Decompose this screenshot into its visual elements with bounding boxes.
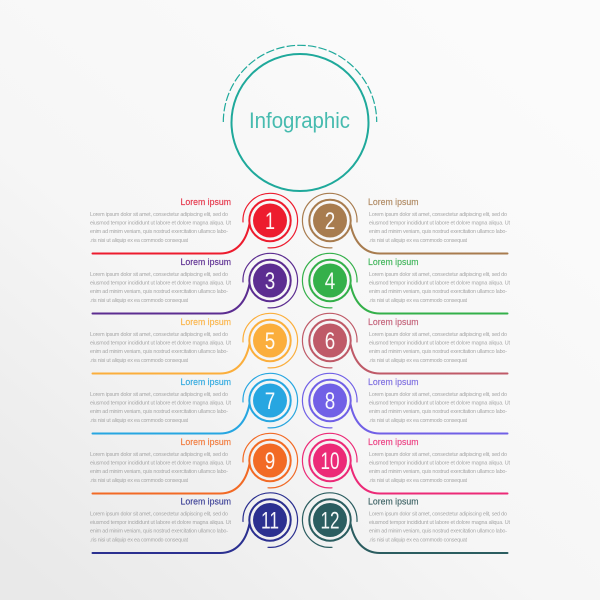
item 2: .ris nisi ut aliquip ex ea commodo consequat	[369, 238, 468, 244]
item 3: eiusmod tempor incididunt ut labore et dolore magna aliqua. Ut	[90, 281, 232, 287]
item 12: eiusmod tempor incididunt ut labore et dolore magna aliqua. Ut	[369, 520, 510, 526]
item 3: Lorem ipsum	[180, 257, 231, 268]
item 10	[302, 433, 510, 494]
item 6: Lorem ipsum	[368, 317, 419, 328]
item 8: eiusmod tempor incididunt ut labore et dolore magna aliqua. Ut	[369, 401, 510, 407]
item 1: enim ad minim veniam, quis nostrud exercitation ullamco labo-	[90, 229, 228, 235]
item 11	[90, 493, 298, 553]
item 1: 1	[265, 208, 275, 235]
item 5: .ris nisi ut aliquip ex ea commodo consequat	[90, 358, 188, 364]
item 10: 10	[320, 448, 340, 475]
item 4: Lorem ipsum dolor sit amet, consectetur adipiscing elit, sed do	[369, 272, 507, 278]
item 6: .ris nisi ut aliquip ex ea commodo consequat	[369, 358, 468, 364]
item 7: Lorem ipsum dolor sit amet, consectetur adipiscing elit, sed do	[90, 392, 228, 398]
main circle heading	[223, 45, 377, 191]
item 11: enim ad minim veniam, quis nostrud exercitation ullamco labo-	[90, 529, 228, 535]
item 2	[302, 193, 510, 254]
item 7: 7	[265, 388, 275, 415]
item 9	[90, 433, 298, 494]
item 3: enim ad minim veniam, quis nostrud exercitation ullamco labo-	[90, 289, 228, 295]
item 4: eiusmod tempor incididunt ut labore et dolore magna aliqua. Ut	[369, 281, 510, 287]
item 6: enim ad minim veniam, quis nostrud exercitation ullamco labo-	[369, 349, 507, 355]
item 1: eiusmod tempor incididunt ut labore et dolore magna aliqua. Ut	[90, 221, 232, 227]
item 9: Lorem ipsum dolor sit amet, consectetur adipiscing elit, sed do	[90, 452, 228, 458]
item 12: enim ad minim veniam, quis nostrud exercitation ullamco labo-	[369, 529, 507, 535]
item 2: Lorem ipsum dolor sit amet, consectetur adipiscing elit, sed do	[369, 212, 507, 218]
item 2: eiusmod tempor incididunt ut labore et dolore magna aliqua. Ut	[369, 221, 510, 227]
item 9: Lorem ipsum	[180, 437, 231, 448]
item 4: .ris nisi ut aliquip ex ea commodo consequat	[369, 298, 468, 304]
item 12: Lorem ipsum	[368, 496, 419, 508]
item 5: enim ad minim veniam, quis nostrud exercitation ullamco labo-	[90, 349, 228, 355]
item 7: Lorem ipsum	[180, 377, 231, 388]
item 6	[302, 313, 510, 374]
item 3: 3	[265, 268, 275, 295]
item 9: eiusmod tempor incididunt ut labore et dolore magna aliqua. Ut	[90, 461, 232, 467]
item 4: Lorem ipsum	[368, 257, 419, 268]
item 7	[90, 373, 298, 434]
item 7: .ris nisi ut aliquip ex ea commodo consequat	[90, 418, 188, 424]
item 2: 2	[325, 208, 335, 235]
item 10: eiusmod tempor incididunt ut labore et dolore magna aliqua. Ut	[369, 461, 510, 467]
item 10: .ris nisi ut aliquip ex ea commodo consequat	[369, 478, 468, 484]
item 7: enim ad minim veniam, quis nostrud exercitation ullamco labo-	[90, 409, 228, 415]
item 8	[302, 373, 510, 434]
item 4: enim ad minim veniam, quis nostrud exercitation ullamco labo-	[369, 289, 507, 295]
item 12: Lorem ipsum dolor sit amet, consectetur adipiscing elit, sed do	[369, 512, 507, 518]
item 5	[90, 313, 298, 374]
item 8: .ris nisi ut aliquip ex ea commodo consequat	[369, 418, 468, 424]
item 10: Lorem ipsum	[368, 437, 419, 448]
item 1: .ris nisi ut aliquip ex ea commodo consequat	[90, 238, 188, 244]
item 9: .ris nisi ut aliquip ex ea commodo consequat	[90, 478, 188, 484]
item 9: enim ad minim veniam, quis nostrud exercitation ullamco labo-	[90, 469, 228, 475]
item 1	[90, 193, 298, 254]
item 12: 12	[320, 508, 340, 534]
item 5: 5	[265, 328, 275, 355]
item 5: Lorem ipsum	[180, 317, 231, 328]
item 7: eiusmod tempor incididunt ut labore et dolore magna aliqua. Ut	[90, 401, 232, 407]
item 8: Lorem ipsum dolor sit amet, consectetur adipiscing elit, sed do	[369, 392, 507, 398]
item 6: Lorem ipsum dolor sit amet, consectetur adipiscing elit, sed do	[369, 332, 507, 338]
item 3: .ris nisi ut aliquip ex ea commodo consequat	[90, 298, 188, 304]
item 5: eiusmod tempor incididunt ut labore et dolore magna aliqua. Ut	[90, 341, 232, 347]
item 10: enim ad minim veniam, quis nostrud exercitation ullamco labo-	[369, 469, 507, 475]
item 3: Lorem ipsum dolor sit amet, consectetur adipiscing elit, sed do	[90, 272, 228, 278]
main circle heading: Infographic	[249, 108, 350, 133]
item 8: Lorem ipsum	[368, 377, 419, 388]
item 12	[302, 493, 510, 553]
item 5: Lorem ipsum dolor sit amet, consectetur adipiscing elit, sed do	[90, 332, 228, 338]
item 2: enim ad minim veniam, quis nostrud exercitation ullamco labo-	[369, 229, 507, 235]
item 6: 6	[325, 328, 335, 355]
item 11: .ris nisi ut aliquip ex ea commodo consequat	[90, 537, 188, 543]
item 2: Lorem ipsum	[368, 197, 419, 208]
item 1: Lorem ipsum	[180, 197, 231, 208]
item 8: enim ad minim veniam, quis nostrud exercitation ullamco labo-	[369, 409, 507, 415]
item 11: Lorem ipsum dolor sit amet, consectetur adipiscing elit, sed do	[90, 512, 228, 518]
item 11: Lorem ipsum	[180, 496, 231, 508]
item 6: eiusmod tempor incididunt ut labore et dolore magna aliqua. Ut	[369, 341, 510, 347]
item 9: 9	[265, 448, 275, 475]
item 11: 11	[261, 508, 279, 534]
item 10: Lorem ipsum dolor sit amet, consectetur adipiscing elit, sed do	[369, 452, 507, 458]
item 12: .ris nisi ut aliquip ex ea commodo consequat	[369, 537, 468, 543]
item 4	[302, 253, 510, 314]
item 8: 8	[325, 388, 335, 415]
item 1: Lorem ipsum dolor sit amet, consectetur adipiscing elit, sed do	[90, 212, 228, 218]
item 11: eiusmod tempor incididunt ut labore et dolore magna aliqua. Ut	[90, 520, 232, 526]
item 4: 4	[325, 268, 335, 295]
item 3	[90, 253, 298, 314]
